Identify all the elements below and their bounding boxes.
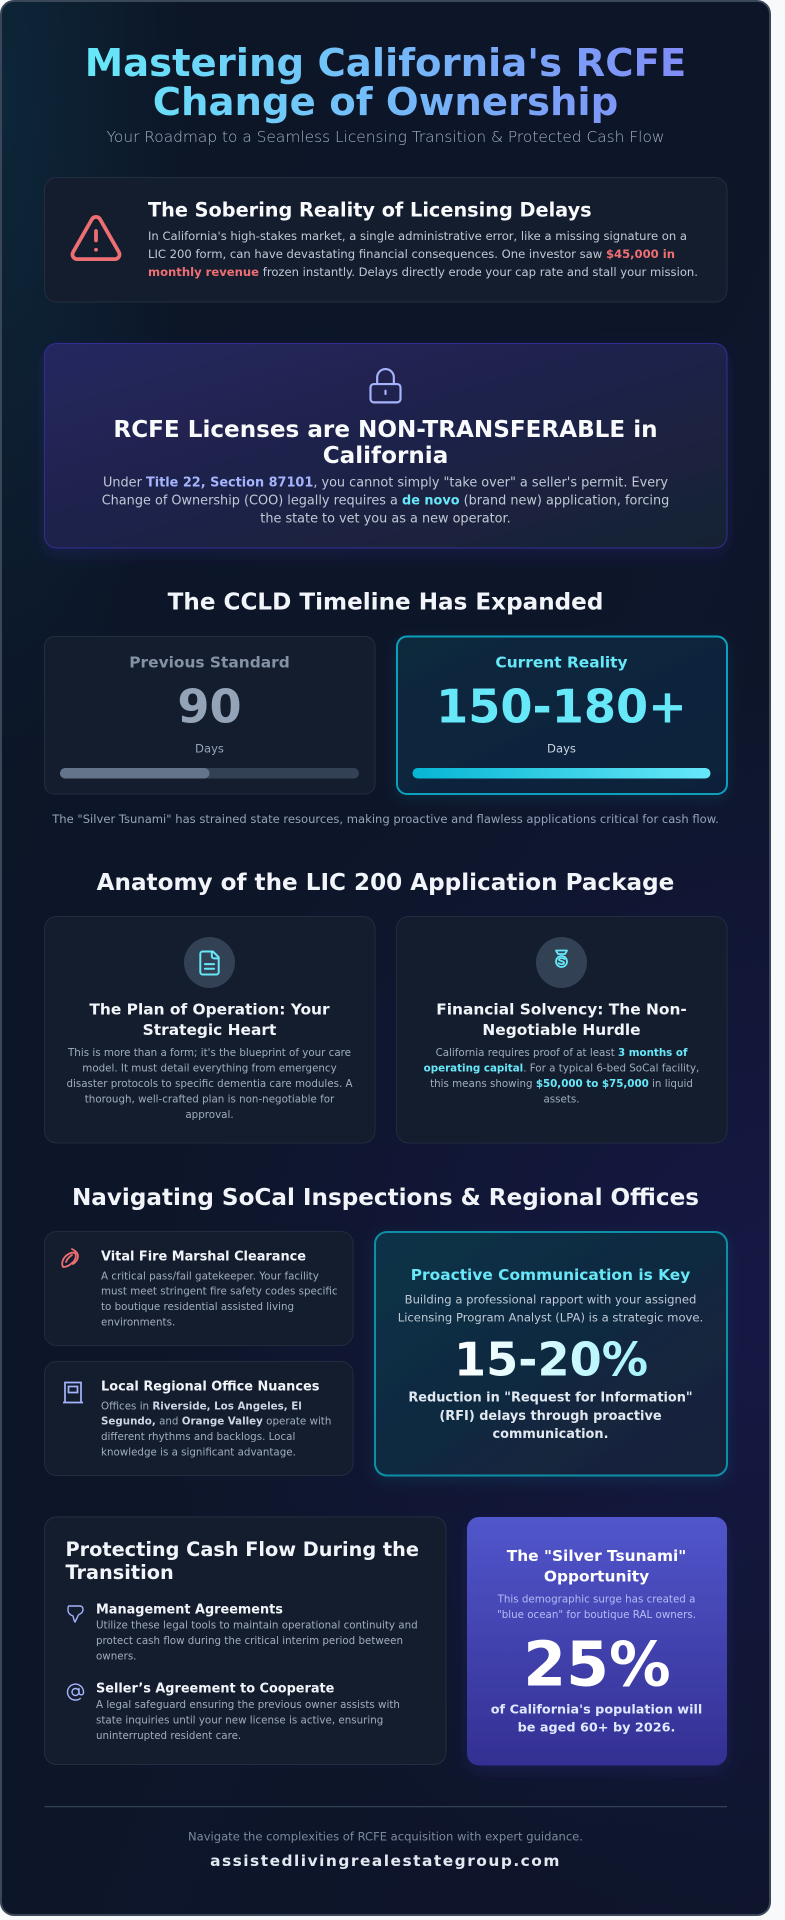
item: management agreements: Utilize these legal tools to maintain operational continuity and (96, 1620, 418, 1632)
body text: Building a professional rapport with your assigned (405, 1292, 696, 1306)
stat caption: communication. (493, 1427, 608, 1442)
body text: assets. (543, 1093, 580, 1105)
panel: previous standard (44, 636, 375, 794)
panel: fire marshal (44, 1232, 353, 1346)
body text: "blue ocean" for boutique RAL owners. (497, 1609, 696, 1621)
heading: Protecting Cash Flow During the (66, 1538, 419, 1561)
title (85, 41, 686, 125)
icon: warning triangle (73, 217, 119, 259)
subtitle: Your Roadmap to a Seamless Licensing Transition & Protected Cash Flow (107, 128, 664, 146)
footer: assistedlivingrealestategroup.com (210, 1852, 561, 1870)
panel: current reality: Current Reality (495, 653, 628, 671)
heading (66, 1538, 419, 1584)
heading: anatomy: Anatomy of the LIC 200 Application Package (97, 870, 674, 896)
body text (497, 1594, 696, 1621)
heading: Opportunity (544, 1568, 649, 1586)
stat: 15-20%: 15-20% (454, 1333, 648, 1387)
item: seller's agreement: A legal safeguard ensuring the previous owner assists with (96, 1699, 400, 1711)
item: management agreements: Management Agreements (96, 1602, 283, 1618)
item: seller's agreement (96, 1681, 400, 1742)
body text: California requires proof of at least 3 months of (436, 1047, 688, 1059)
heading: Negotiable Hurdle (482, 1021, 641, 1039)
body text: disaster protocols to specific dementia care modules. A (66, 1078, 353, 1090)
body text: A critical pass/fail gatekeeper. Your facility (101, 1270, 319, 1282)
body text: must meet stringent fire safety codes specific (101, 1286, 338, 1298)
item: seller's agreement: Seller’s Agreement to Cooperate (96, 1681, 335, 1696)
heading: The Plan of Operation: Your (89, 1000, 330, 1018)
heading: The "Silver Tsunami" (507, 1547, 686, 1565)
body text: model. It must detail everything from emergency (82, 1062, 337, 1074)
panel: current reality (397, 636, 727, 794)
panel: silver tsunami (467, 1517, 727, 1766)
body text: approval. (185, 1109, 234, 1121)
panel: protecting cash flow (44, 1517, 446, 1764)
body text (148, 229, 698, 279)
item: management agreements (96, 1602, 418, 1662)
panel: financial solvency (396, 916, 727, 1143)
icon: money (536, 937, 587, 988)
panel: previous standard: Previous Standard (129, 653, 290, 671)
body text (66, 1047, 353, 1121)
body text (424, 1047, 699, 1105)
body text: Change of Ownership (COO) legally requires a de novo (brand new) application, forcing (102, 494, 669, 509)
heading: Local Regional Office Nuances (101, 1380, 320, 1395)
panel: proactive communication (375, 1232, 727, 1476)
body text: operating capital. For a typical 6-bed SoCal facility, (424, 1062, 699, 1074)
icon: lock (371, 369, 401, 402)
stat: 25%: 25% (523, 1629, 671, 1701)
body text: Licensing Program Analyst (LPA) is a strategic move. (398, 1310, 703, 1324)
icon: document (184, 937, 235, 988)
heading (89, 1000, 330, 1039)
heading (507, 1547, 686, 1586)
panel: plan of operation (44, 916, 375, 1143)
heading: timeline: The CCLD Timeline Has Expanded (168, 589, 603, 615)
item: management agreements: owners. (96, 1650, 136, 1662)
body text: Offices in Riverside, Los Angeles, El (101, 1400, 302, 1412)
body text (101, 1270, 338, 1328)
heading (113, 417, 658, 469)
panel: non-transferable (44, 344, 727, 548)
item: seller's agreement: state inquiries until your new license is active, ensuring (96, 1714, 383, 1726)
body text: This is more than a form; it's the blueprint of your care (67, 1047, 351, 1059)
body text: the state to vet you as a new operator. (260, 512, 511, 527)
icon: shield note (68, 1606, 83, 1622)
footer: Navigate the complexities of RCFE acquisition with expert guidance. (188, 1830, 583, 1844)
body text: Under Title 22, Section 87101, you cannot simply "take over" a seller's permit. Every (103, 476, 668, 491)
body text: Segundo, and Orange Valley operate with (101, 1416, 331, 1428)
body text: different rhythms and backlogs. Local (101, 1431, 295, 1443)
body text: to boutique residential assisted living (101, 1301, 294, 1313)
panel: regional offices (44, 1362, 353, 1476)
timeline note: The "Silver Tsunami" has strained state resources, making proactive and flawless applications critical for cash flow. (51, 812, 719, 826)
panel: current reality: Days (547, 742, 576, 756)
item: management agreements: protect cash flow during the critical interim period between (96, 1635, 403, 1647)
stat caption: be aged 60+ by 2026. (518, 1720, 675, 1735)
heading: The Sobering Reality of Licensing Delays (148, 199, 592, 222)
title: Mastering California's RCFE (85, 41, 686, 86)
heading: Transition (66, 1561, 174, 1584)
heading: Proactive Communication is Key (411, 1266, 690, 1284)
bar: 150-180 days (412, 768, 710, 778)
panel: previous standard: Days (195, 742, 224, 756)
body text: monthly revenue frozen instantly. Delays directly erode your cap rate and stall your mission. (148, 265, 698, 279)
footer (188, 1830, 583, 1870)
stat caption: Reduction in "Request for Information" (408, 1391, 693, 1406)
body text (102, 476, 669, 527)
heading: RCFE Licenses are NON-TRANSFERABLE in (113, 417, 658, 443)
panel: licensing delays (44, 178, 727, 302)
heading: Financial Solvency: The Non- (436, 1000, 687, 1018)
stat caption (491, 1702, 702, 1735)
stat caption: (RFI) delays through proactive (439, 1409, 662, 1424)
icon: door (63, 1382, 83, 1402)
icon: flame (62, 1249, 78, 1267)
body text: knowledge is a significant advantage. (101, 1446, 296, 1458)
item: seller's agreement: uninterrupted resident care. (96, 1730, 241, 1742)
body text: LIC 200 form, can have devastating financial consequences. One investor saw $45,000 in (148, 247, 675, 261)
icon: at sign (68, 1684, 84, 1700)
heading: California (323, 443, 448, 469)
body text: In California's high-stakes market, a single administrative error, like a missing signature on a (148, 229, 687, 243)
heading: inspections: Navigating SoCal Inspections & Regional Offices (72, 1185, 699, 1211)
body text (101, 1400, 331, 1458)
body text: This demographic surge has created a (497, 1594, 695, 1606)
stat: 150-180 days: 150-180+ (436, 680, 687, 734)
stat caption: of California's population will (491, 1702, 702, 1717)
stat: 90 days: 90 (177, 680, 242, 734)
stat caption (408, 1391, 693, 1442)
bar: 90 days (60, 768, 359, 778)
body text: environments. (101, 1316, 175, 1328)
heading (436, 1000, 687, 1039)
body text: thorough, well-crafted plan is non-negotiable for (85, 1093, 335, 1105)
body text (398, 1292, 703, 1324)
heading: Vital Fire Marshal Clearance (101, 1250, 306, 1265)
body text: this means showing $50,000 to $75,000 in liquid (430, 1078, 693, 1090)
title: Change of Ownership (153, 80, 618, 125)
heading: Strategic Heart (143, 1021, 276, 1039)
